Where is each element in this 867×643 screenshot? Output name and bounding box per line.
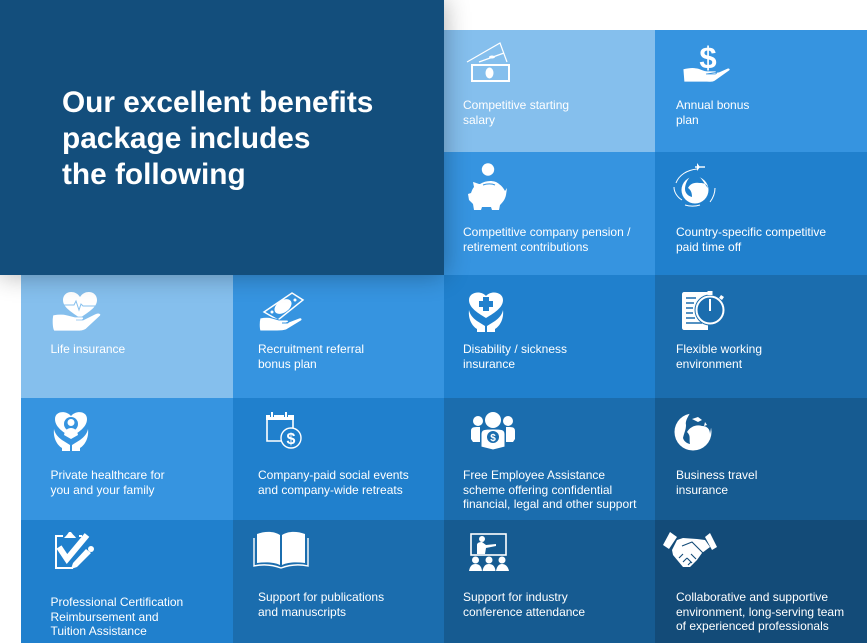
panel: annual bonus plan: [655, 30, 867, 152]
panel: collaborative: [655, 520, 867, 643]
icon: heart cross hands: [468, 292, 504, 332]
icon: money in hand: [260, 292, 304, 330]
text: flexible: Flexible working: [676, 342, 762, 356]
text: referral: Recruitment referral: [258, 342, 364, 356]
icon: hand with dollar: [683, 40, 730, 82]
panel: life insurance: [21, 275, 233, 398]
panel: paid time off: [655, 152, 867, 275]
title: the following: [62, 158, 246, 191]
text: life insurance: Life insurance: [50, 342, 125, 356]
text: publications: [258, 590, 384, 619]
text: certification: Tuition Assistance: [50, 624, 147, 638]
icon: heart person hands: [54, 412, 88, 451]
text: assistance: Free Employee Assistance: [463, 468, 605, 482]
text: salary: salary: [463, 113, 495, 127]
icon: group with dollar: [471, 412, 515, 450]
text: pension: [463, 225, 630, 254]
text: publications: Support for publications: [258, 590, 384, 604]
text: flexible: environment: [676, 357, 742, 371]
text: assistance: financial, legal and other support: [463, 497, 636, 511]
title: [62, 86, 373, 191]
panel: pension: [444, 152, 655, 275]
text: travel: insurance: [676, 483, 728, 497]
text: healthcare: [50, 468, 165, 497]
icon: hand with dollar: $: [699, 40, 717, 75]
text: bonus: [676, 98, 749, 127]
icon: calendar with dollar: [266, 412, 302, 449]
text: collaborative: Collaborative and supportive: [676, 590, 828, 604]
text: conference: [463, 590, 585, 619]
text: salary: [463, 98, 569, 127]
text: healthcare: Private healthcare for: [50, 468, 165, 482]
panel: conference: [444, 520, 655, 643]
text: conference: Support for industry: [463, 590, 568, 604]
icon: globe with plane: [674, 163, 716, 207]
text: certification: Reimbursement and: [50, 610, 159, 624]
title: package includes: [62, 122, 310, 155]
text: social: Company-paid social events: [258, 468, 409, 482]
panel: competitive starting salary: [444, 30, 655, 152]
icon: globe: [674, 414, 712, 450]
icon: presenter and audience: [469, 533, 509, 571]
panel: private healthcare: [21, 398, 233, 520]
text: social: and company-wide retreats: [258, 483, 403, 497]
icon: group with dollar: $: [490, 433, 496, 444]
text: bonus: plan: [676, 113, 699, 127]
icon: banknotes: [466, 42, 510, 82]
text: healthcare: you and your family: [50, 483, 155, 497]
text: time off: Country-specific competitive: [676, 225, 826, 239]
panel: employee assistance: [444, 398, 655, 520]
text: assistance: scheme offering confidential: [463, 483, 612, 497]
text: certification: [50, 595, 183, 638]
text: salary: Competitive starting: [463, 98, 569, 112]
text: certification: Professional Certification: [50, 595, 183, 609]
text: referral: bonus plan: [258, 357, 317, 371]
panel: flexible working: [655, 275, 867, 398]
icon: document and stopwatch: [682, 291, 724, 330]
text: conference: conference attendance: [463, 605, 585, 619]
text: collaborative: [676, 590, 844, 633]
text: disability: insurance: [463, 357, 515, 371]
text: pension: Competitive company pension /: [463, 225, 630, 239]
text: disability: [463, 342, 567, 371]
panel: disability insurance: [444, 275, 655, 398]
icon: heart in hand: [52, 292, 100, 331]
text: travel: Business travel: [676, 468, 757, 482]
text: collaborative: of experienced professionals: [676, 619, 829, 633]
icon: handshake: [663, 532, 717, 567]
title panel: [0, 0, 444, 275]
panel: publications: [233, 520, 444, 643]
icon: open book: [253, 532, 309, 569]
text: collaborative: environment, long-serving team: [676, 605, 844, 619]
text: disability: Disability / sickness: [463, 342, 567, 356]
text: publications: and manuscripts: [258, 605, 346, 619]
panel: certification: [21, 520, 233, 643]
text: pension: retirement contributions: [463, 240, 588, 254]
text: travel: [676, 468, 757, 497]
title: Our excellent benefits: [62, 86, 373, 119]
icon: clipboard check: [55, 532, 94, 569]
text: referral: [258, 342, 364, 371]
text: social: [258, 468, 409, 497]
panel: social events: [233, 398, 444, 520]
text: time off: [676, 225, 826, 254]
panel: travel insurance: [655, 398, 867, 520]
icon: piggy bank: [468, 163, 507, 210]
text: time off: paid time off: [676, 240, 741, 254]
text: assistance: [463, 468, 636, 511]
panel: referral bonus: [233, 275, 444, 398]
icon: calendar with dollar: $: [287, 431, 296, 448]
text: flexible: [676, 342, 762, 371]
text: bonus: Annual bonus: [676, 98, 749, 112]
